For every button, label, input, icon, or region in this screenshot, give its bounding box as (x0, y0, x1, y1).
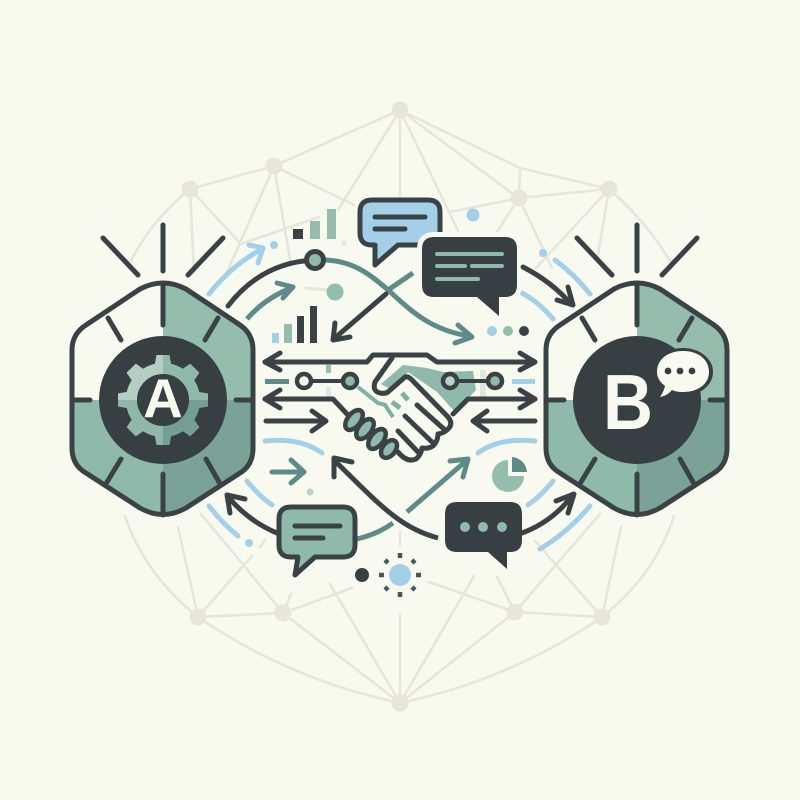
dark dot (355, 568, 369, 582)
hexagon A rays (103, 225, 223, 275)
top double arrow (265, 353, 535, 370)
hexagon A ticks (75, 283, 250, 515)
fifth row blue arcs (265, 440, 535, 453)
fist with green fingers (342, 407, 400, 461)
bubble dots (665, 368, 695, 374)
speech bubble: blue (360, 200, 440, 265)
letter B: B (603, 358, 653, 446)
pale dot (342, 240, 346, 246)
blue accent dots (245, 208, 547, 547)
flow arrow: blue upper left (209, 245, 263, 294)
bubble border (655, 350, 711, 394)
bubble body (657, 351, 709, 397)
wave flow: dark arc with node (228, 260, 315, 306)
hexagon B ticks (549, 283, 724, 515)
green dot with pale line (305, 284, 344, 300)
gear icon (118, 355, 208, 445)
pie chart (492, 457, 527, 492)
teal curved arrow upper left (247, 283, 293, 319)
handshake icon (342, 358, 451, 461)
right hand outline (374, 358, 451, 460)
dark arrow lower left (227, 495, 277, 533)
hexagon A with gear (70, 222, 256, 518)
flow arcs: blue upper right (522, 260, 590, 319)
hexagon A fill quadrants (74, 286, 250, 512)
wave flow: teal arrow (315, 260, 472, 343)
bar chart mid (272, 306, 317, 343)
teal arrow lower centre (357, 459, 468, 539)
teal wrist lines (358, 387, 408, 417)
background network: top (131, 102, 672, 272)
letter A: A (143, 367, 183, 429)
B speech bubble icon (655, 350, 711, 397)
three dots (487, 326, 529, 336)
flow arcs: blue lower (209, 481, 590, 549)
speech bubble: dark with text lines (422, 237, 517, 316)
hexagon B outline (546, 283, 727, 514)
background network: bottom (125, 514, 674, 712)
small bar chart top (293, 209, 336, 239)
central connector lines (265, 353, 535, 453)
speech bubble: dark with dots (445, 502, 522, 569)
pale dot (306, 488, 314, 496)
dark arrow upper right (523, 267, 573, 305)
small teal arrow lower left (272, 460, 304, 483)
fingers (398, 405, 445, 452)
node on wave (306, 252, 324, 268)
arrow from dark bubble to lower left (333, 273, 413, 340)
dark arrow lower right (522, 494, 574, 533)
third row arrows (265, 390, 535, 414)
dark arrow lower centre (334, 458, 438, 538)
speech bubble: green (279, 507, 355, 575)
hexagon B rays (577, 225, 697, 275)
hexagon A outline (72, 283, 253, 514)
sun icon (379, 553, 421, 597)
hexagon A centre disc (99, 336, 227, 464)
hexagon B with speech bubble (544, 222, 730, 518)
fourth row arrows (266, 411, 535, 431)
hexagon B fill quadrants (548, 286, 724, 512)
hexagon B centre disc (573, 336, 701, 464)
circuit nodes row (265, 365, 535, 412)
